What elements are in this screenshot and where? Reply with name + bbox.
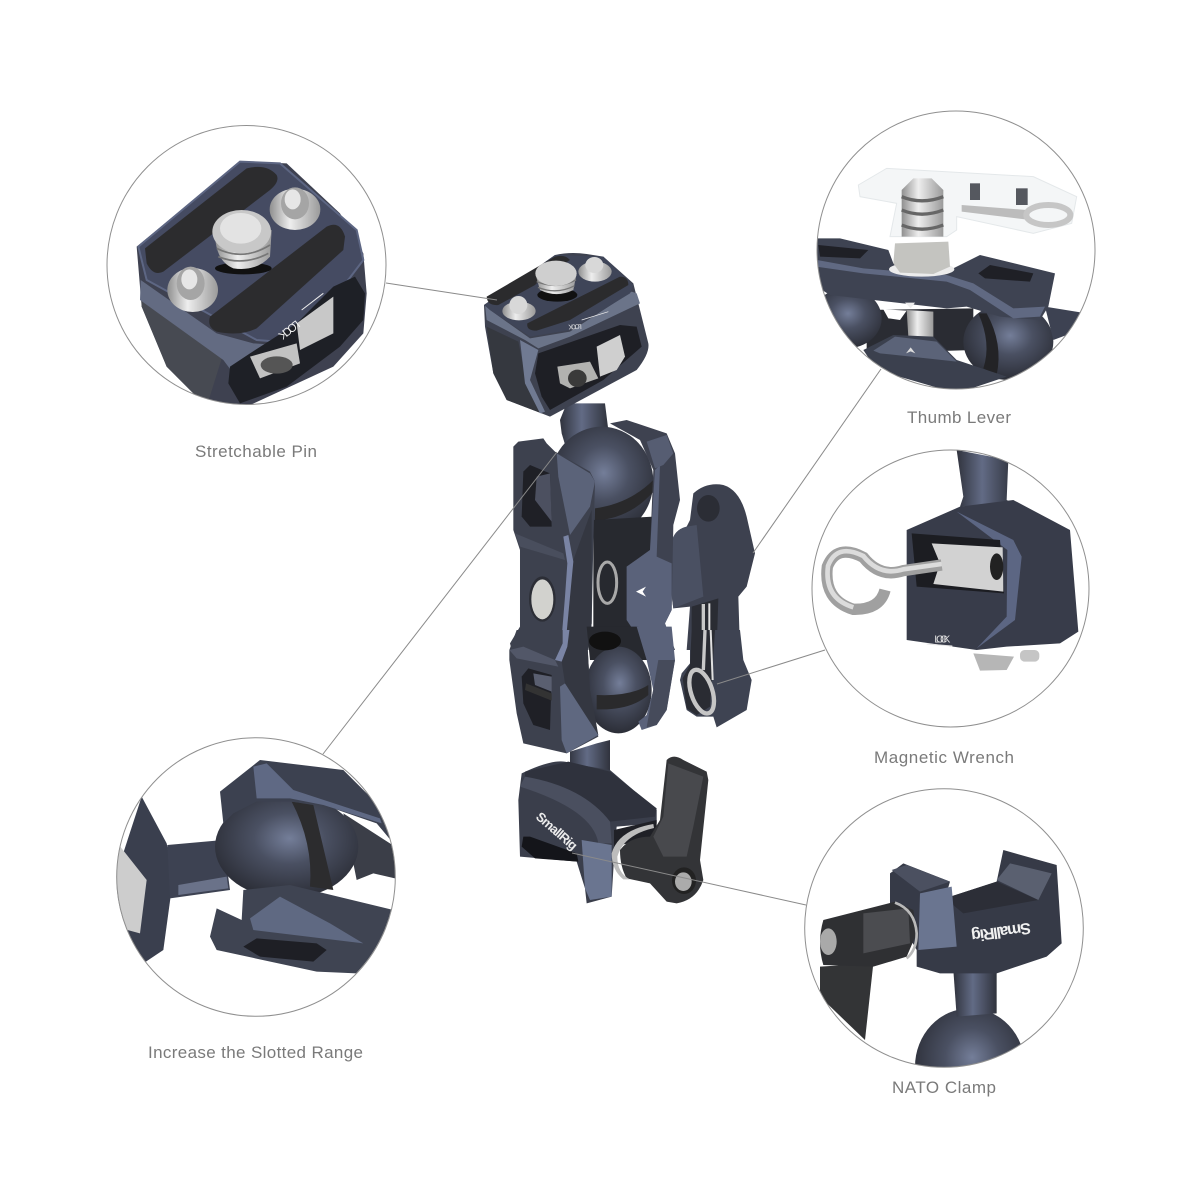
LOCK mark: LOCK xyxy=(568,322,582,330)
left pin xyxy=(502,296,536,320)
label: NATO clamp: NATO Clamp xyxy=(892,1078,996,1097)
label: magnetic wrench: Magnetic Wrench xyxy=(874,748,1014,767)
lock lever xyxy=(612,757,708,903)
top bracket xyxy=(220,760,393,843)
LOCK mark: LOCK xyxy=(934,635,951,646)
neck xyxy=(957,450,1013,507)
channel floor xyxy=(945,882,1038,913)
left pin xyxy=(167,267,218,312)
circle outlines xyxy=(107,111,1095,1067)
top face xyxy=(484,255,633,337)
panel: NATO clamp xyxy=(820,850,1062,1125)
lever arm lower xyxy=(680,630,752,727)
bottom bracket xyxy=(210,885,393,973)
knurled pin xyxy=(557,335,625,388)
body xyxy=(907,500,1078,650)
dark core xyxy=(593,517,653,643)
lower bracket right xyxy=(637,627,675,730)
dark backdrop above ball xyxy=(587,627,650,660)
front window xyxy=(535,325,642,410)
right ball xyxy=(964,307,1080,380)
brand text: SmallRig xyxy=(970,919,1032,944)
LOCK mark: LOCK xyxy=(275,317,302,341)
center screw xyxy=(535,261,577,302)
leader line: NATO clamp xyxy=(572,853,806,905)
panel: stretchable pin xyxy=(137,162,367,407)
lower left side xyxy=(141,301,221,398)
panel photo xyxy=(137,162,367,407)
LOCK mark xyxy=(275,293,323,341)
side window xyxy=(228,277,365,403)
direction arrow upper xyxy=(905,303,915,308)
small wrench xyxy=(962,183,1070,225)
label: stretchable pin: Stretchable Pin xyxy=(195,442,317,461)
lower ball xyxy=(585,632,652,733)
small pin xyxy=(1020,650,1039,662)
label: increase the slotted range: Increase the Slotted Range xyxy=(148,1043,363,1062)
lower bracket xyxy=(863,335,1007,393)
bracket bar xyxy=(817,238,1055,320)
compression spring xyxy=(902,178,943,237)
knurled pin xyxy=(250,297,333,378)
knurled block xyxy=(115,840,147,933)
LOCK mark xyxy=(568,312,608,330)
lit edge xyxy=(957,512,1022,648)
neck xyxy=(953,970,997,1017)
infographic canvas xyxy=(106,110,1096,1096)
left bracket xyxy=(510,438,595,650)
lit edge xyxy=(485,292,640,348)
clamp brand text: SmallRig xyxy=(533,809,581,853)
handle xyxy=(820,902,917,1040)
white gap xyxy=(883,309,907,320)
panel: thumb lever xyxy=(812,168,1087,393)
right pin xyxy=(578,257,612,282)
left jaw top xyxy=(892,865,950,892)
lower arm and clamp section xyxy=(509,627,752,903)
clamp body xyxy=(890,850,1062,973)
left bracket lower xyxy=(509,630,598,753)
center hole xyxy=(990,553,1003,580)
direction arrow xyxy=(636,587,646,597)
top plate face xyxy=(138,162,363,343)
right jaw inner xyxy=(997,863,1052,900)
window xyxy=(912,533,1004,593)
plate body xyxy=(484,253,649,417)
top plate section xyxy=(484,253,649,417)
hook wrench xyxy=(827,551,942,609)
rubber pad left xyxy=(145,167,277,273)
lit edge xyxy=(140,280,264,368)
right pin xyxy=(270,187,320,230)
center gap xyxy=(867,308,973,353)
magnet xyxy=(529,576,556,622)
panel photo xyxy=(827,450,1078,671)
left ball xyxy=(825,293,882,347)
right bracket xyxy=(610,420,680,650)
upper window xyxy=(522,465,552,527)
knurled pin block xyxy=(932,543,1003,592)
leader line: stretchable pin xyxy=(386,283,497,300)
panel photo xyxy=(115,760,395,973)
panel: magnetic wrench xyxy=(827,450,1078,671)
LOCK mark xyxy=(927,635,952,646)
center screw xyxy=(212,210,272,274)
ball xyxy=(215,795,358,898)
right inner arm xyxy=(343,813,395,880)
leader line: thumb lever xyxy=(753,369,881,553)
hex nut xyxy=(889,242,954,277)
panel photo xyxy=(812,168,1087,393)
screw thread xyxy=(973,653,1014,671)
main product: ball head arm xyxy=(484,253,755,903)
left plate xyxy=(117,797,173,963)
label: thumb lever: Thumb Lever xyxy=(907,408,1011,427)
lever arm xyxy=(671,484,755,650)
lower spring xyxy=(907,310,933,338)
panel: slotted range xyxy=(115,760,395,973)
upper ball xyxy=(550,427,653,537)
left jaw lit face xyxy=(918,887,957,950)
lit corner strip xyxy=(520,340,545,413)
panel photo xyxy=(820,850,1062,1125)
neck xyxy=(167,840,230,898)
neck highlight xyxy=(178,877,228,895)
ball xyxy=(915,1008,1025,1125)
transparent lever xyxy=(858,168,1077,237)
rubber ring xyxy=(292,802,333,890)
spring xyxy=(598,562,617,603)
leader line: magnetic wrench xyxy=(717,650,825,684)
leader line: slotted range xyxy=(323,452,557,754)
lower neck xyxy=(568,740,610,780)
dark left face xyxy=(487,327,542,413)
rubber pads xyxy=(487,256,628,331)
middle arm section xyxy=(510,403,755,650)
upper neck xyxy=(560,403,608,450)
rubber pad right xyxy=(209,225,345,334)
clamp body xyxy=(518,761,657,903)
plate body xyxy=(137,162,367,407)
